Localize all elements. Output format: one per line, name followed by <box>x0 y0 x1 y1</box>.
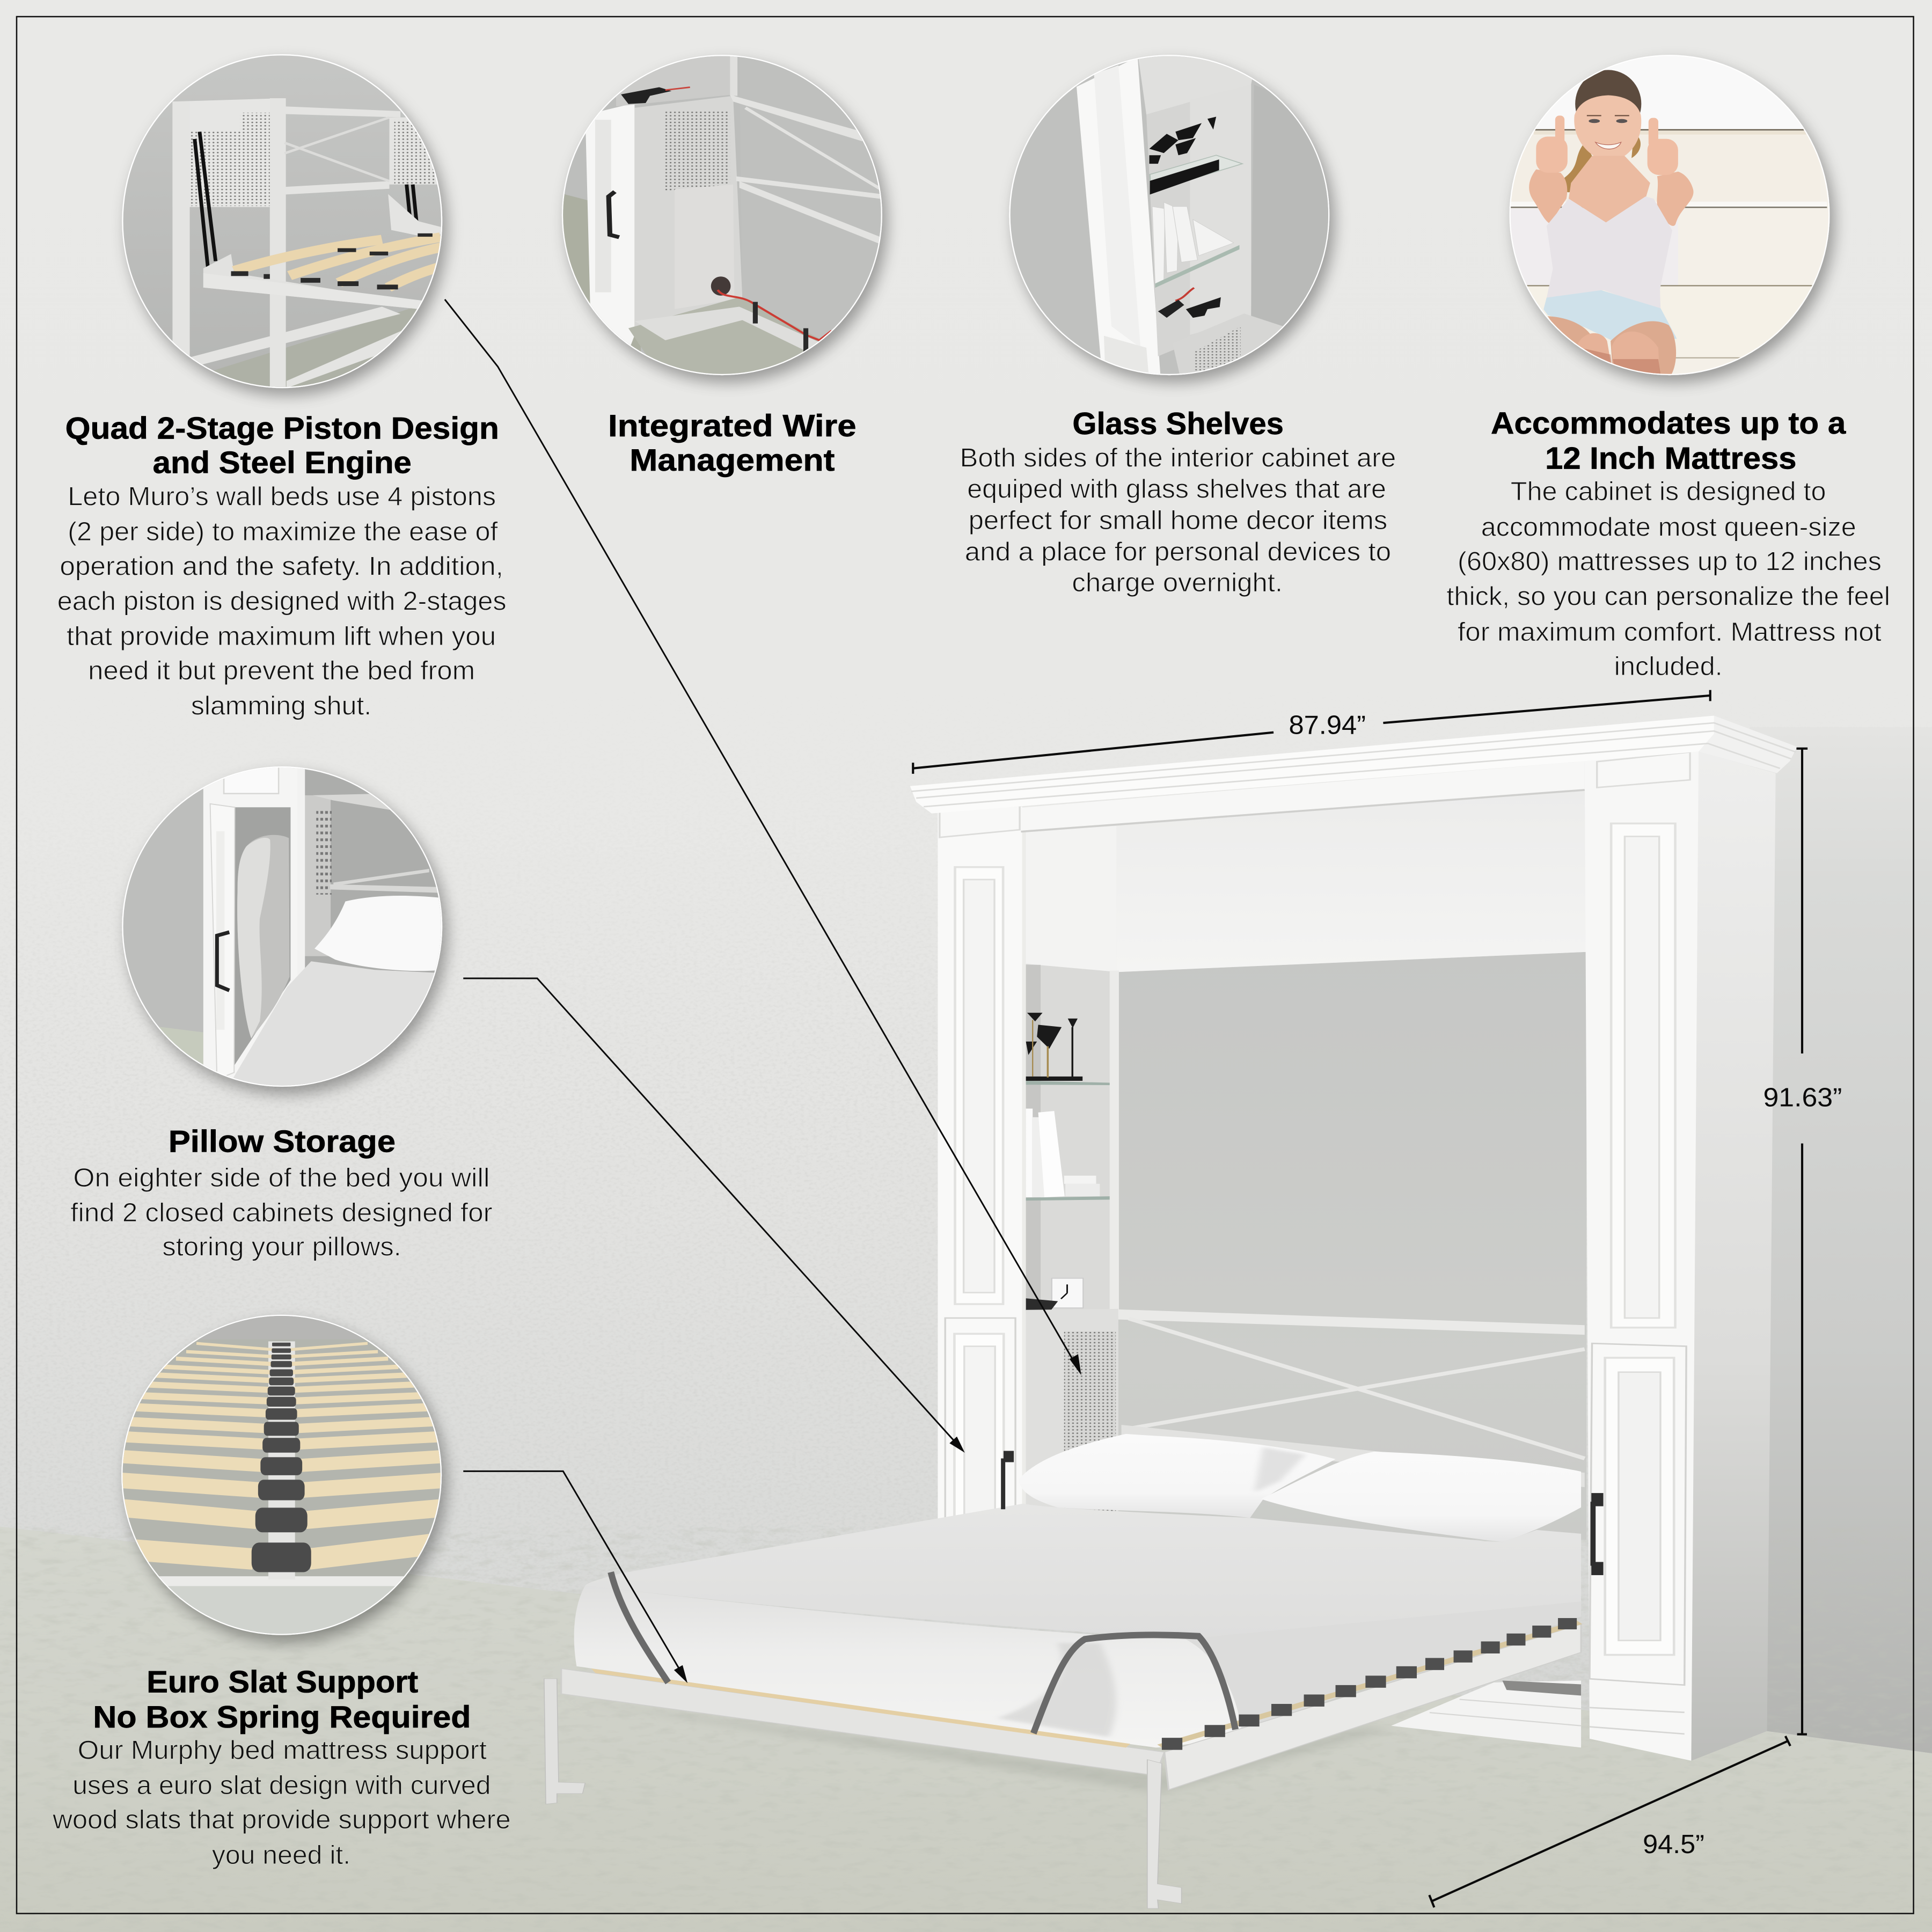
feet <box>1578 332 1660 375</box>
face <box>1574 96 1641 163</box>
mattress side drape <box>1186 1601 1581 1730</box>
body text <box>57 481 507 721</box>
feature heading: integrated wire management <box>608 409 857 478</box>
dimension: width: 87.94” <box>1289 710 1366 740</box>
upper glass shelf <box>1150 155 1242 192</box>
shaded wall right of the cabinet <box>1750 727 1932 1753</box>
concrete back wall <box>1118 952 1586 1540</box>
sunglasses <box>1026 1298 1058 1311</box>
wall texture <box>6 1062 929 1371</box>
body text: need it but prevent the bed from <box>88 656 475 685</box>
floor shadow below bed <box>561 1700 1391 1794</box>
body text: and a place for personal devices to <box>965 537 1391 567</box>
body text: On eighter side of the bed you will <box>73 1163 489 1192</box>
murphy bed with mattress <box>544 1434 1604 1908</box>
right wood slats <box>290 1343 447 1559</box>
feature text: euro slat support <box>52 1665 511 1870</box>
body text: Leto Muro’s wall beds use 4 pistons <box>68 481 496 511</box>
circle shadow and border <box>122 766 442 1087</box>
legs <box>1548 316 1676 375</box>
bed frame side rail <box>1165 1624 1581 1790</box>
cross brace <box>284 118 390 181</box>
stored pillow <box>237 835 290 1038</box>
left retaining strap <box>611 1572 668 1682</box>
open door <box>210 804 235 1079</box>
circle: pillow storage detail <box>118 758 447 1100</box>
vent panel <box>1173 313 1283 382</box>
heading: Euro Slat Support <box>147 1665 418 1700</box>
feature text: glass shelves <box>960 407 1396 597</box>
steel frame posts <box>173 98 401 387</box>
near pillow <box>1261 1452 1581 1542</box>
body text: find 2 closed cabinets designed for <box>70 1198 493 1227</box>
heading <box>65 411 499 480</box>
bed lower rail <box>1122 1425 1585 1487</box>
feature heading: integrated wire management: Integrated Wire <box>608 409 857 443</box>
white cabinet door with handle <box>586 103 634 383</box>
feature heading: integrated wire management: Management <box>630 443 835 478</box>
bed pillow <box>314 896 443 971</box>
body text: (60x80) mattresses up to 12 inches <box>1458 547 1882 576</box>
alarm clock <box>1052 1278 1083 1308</box>
slat end caps <box>1162 1618 1577 1750</box>
body text: thick, so you can personalize the feel <box>1446 581 1890 611</box>
left pilaster <box>938 807 1026 1528</box>
right wall with brace bars <box>730 48 887 383</box>
circle shadow and border <box>122 54 442 388</box>
arrow: pillow storage callout to cabinet <box>463 978 965 1453</box>
hair <box>1575 70 1641 138</box>
far pillow <box>1019 1434 1336 1518</box>
right retaining strap <box>1034 1635 1235 1733</box>
denim shorts <box>1543 290 1677 341</box>
door handle <box>217 932 229 990</box>
slat caps <box>231 233 433 289</box>
body text: that provide maximum lift when you <box>67 621 496 651</box>
slat wood edge along side <box>1160 1622 1579 1746</box>
niche with shelves <box>1026 964 1119 1315</box>
mattress top surface <box>585 1504 1581 1639</box>
red wire with clips <box>718 290 832 352</box>
right plinth <box>1590 1708 1685 1734</box>
right thumbs-up hand <box>1648 118 1678 175</box>
black bird decor <box>1026 1013 1082 1081</box>
mattress <box>232 961 447 1096</box>
white pilaster <box>1077 57 1161 382</box>
dimension: height: 91.63” <box>1763 1082 1842 1112</box>
floor speckle texture <box>0 1527 1932 1932</box>
heading: Accommodates up to a <box>1491 406 1846 441</box>
upper interior <box>1138 53 1257 114</box>
left arm <box>1529 170 1567 224</box>
left thumbs-up hand <box>1536 115 1568 173</box>
dimension: depth: 94.5” <box>1643 1829 1704 1859</box>
circle shadow and border <box>1509 55 1829 375</box>
feature text: mattress size <box>1446 406 1890 681</box>
front frame rail <box>118 1576 447 1586</box>
circle shadow and border <box>562 55 882 375</box>
circle: piston design detail <box>117 48 450 398</box>
left lower door <box>945 1318 1015 1524</box>
right door handle <box>1591 1493 1604 1575</box>
murphy bed cabinet <box>910 716 1797 1761</box>
glass shelf lower <box>1026 1196 1110 1201</box>
body text: Our Murphy bed mattress support <box>78 1736 487 1765</box>
body text: included. <box>1614 652 1723 681</box>
concrete floor <box>0 1527 1932 1932</box>
frame bars <box>313 794 440 893</box>
floor <box>628 297 832 383</box>
center slat holders <box>252 1343 311 1572</box>
side wall <box>1251 85 1338 382</box>
alcove above <box>616 48 737 106</box>
phone and red cable <box>1158 288 1194 318</box>
frieze and crown molding <box>910 716 1797 837</box>
body text: accommodate most queen-size <box>1481 513 1856 542</box>
heading: and Steel Engine <box>153 446 412 480</box>
white tank top <box>1547 196 1672 311</box>
eyes and smile <box>1587 115 1629 149</box>
wire port hole <box>711 276 730 296</box>
wood slats <box>234 237 444 288</box>
heading <box>1491 406 1846 476</box>
circle: glass shelves detail <box>1001 48 1338 382</box>
glass shelf upper <box>1026 1081 1110 1085</box>
body text: perfect for small home decor items <box>969 506 1387 535</box>
center steel bar <box>268 1341 295 1579</box>
heading: 12 Inch Mattress <box>1545 442 1796 476</box>
niche back <box>1146 85 1251 356</box>
body text <box>70 1163 493 1262</box>
open compartment <box>234 807 290 1066</box>
stacked mattresses <box>1506 52 1832 377</box>
right pilaster <box>1585 752 1699 1761</box>
body text: operation and the safety. In addition, <box>60 552 503 581</box>
feature text: pillow storage <box>70 1125 493 1262</box>
heading: Glass Shelves <box>1072 407 1284 441</box>
body text: each piston is designed with 2-stages <box>57 586 507 616</box>
mattress front drape <box>574 1586 1241 1747</box>
cabinet frame <box>203 761 300 1083</box>
bed platform frame <box>203 254 441 309</box>
body text: storing your pillows. <box>162 1232 401 1262</box>
cabinet side panel <box>1691 752 1776 1761</box>
right cabinet wall with vent <box>300 761 447 1089</box>
body text: uses a euro slat design with curved <box>72 1770 491 1800</box>
circle shadow and border <box>121 1315 442 1635</box>
body text: slamming shut. <box>191 691 371 721</box>
mattress corner fold shading <box>998 1643 1116 1737</box>
body text: equiped with glass shelves that are <box>967 474 1386 504</box>
heading <box>93 1665 471 1735</box>
circle shadow and border <box>1009 55 1329 375</box>
circle: euro slat detail <box>118 1313 447 1641</box>
arrow: euro slat callout to bed frame <box>463 1471 687 1683</box>
side panel with vent <box>634 96 742 335</box>
right arm <box>1657 172 1693 226</box>
heading: No Box Spring Required <box>93 1700 471 1735</box>
body text: for maximum comfort. Mattress not <box>1458 617 1882 647</box>
body text: wood slats that provide support where <box>52 1805 511 1834</box>
body text <box>1446 477 1890 681</box>
heading: Quad 2-Stage Piston Design <box>65 411 499 445</box>
body text: (2 per side) to maximize the ease of <box>68 517 498 546</box>
sunglasses on shelf <box>621 87 671 104</box>
wood slat edge <box>591 1668 1130 1747</box>
body text: Both sides of the interior cabinet are <box>960 443 1396 472</box>
black gas pistons <box>195 132 416 270</box>
perforated plate right <box>390 118 438 185</box>
heading: Pillow Storage <box>169 1125 396 1159</box>
black birds <box>1150 116 1219 195</box>
cross brace bars <box>1129 1319 1585 1459</box>
left wood slats <box>118 1343 273 1559</box>
lower glass shelf <box>1155 245 1240 288</box>
right folding leg <box>1147 1760 1182 1908</box>
feature text: quad piston <box>57 411 507 721</box>
body text: charge overnight. <box>1072 568 1283 597</box>
red charging cable top <box>665 87 690 90</box>
body text: The cabinet is designed to <box>1511 477 1826 506</box>
perforated piston plate left <box>173 99 270 207</box>
body text <box>960 443 1396 597</box>
books <box>1152 202 1234 283</box>
books on shelf <box>1026 1109 1100 1197</box>
left door handle <box>1001 1451 1014 1509</box>
ponytail <box>1561 142 1596 192</box>
floor <box>156 1026 210 1083</box>
base molding under the bed <box>1391 1680 1581 1747</box>
body text: you need it. <box>212 1840 350 1870</box>
left folding leg <box>544 1679 585 1804</box>
body text <box>52 1736 511 1870</box>
upper interior back panel <box>1116 790 1586 972</box>
dimension: depth <box>1429 1736 1790 1907</box>
arrow: piston callout to bed <box>445 299 1081 1375</box>
bed frame front rail <box>561 1668 1165 1775</box>
dimension: width <box>913 690 1710 774</box>
upper interior left panel <box>1021 826 1116 972</box>
circle: wire management detail <box>554 48 887 383</box>
sunglasses <box>1186 297 1221 318</box>
circle: woman with mattress photo <box>1506 52 1832 377</box>
back wall strip <box>118 1313 447 1340</box>
lower niche cabinet with perforated vent <box>1026 1309 1118 1540</box>
bed top rail <box>1118 1309 1585 1335</box>
right lower door <box>1590 1343 1686 1685</box>
neck and chest <box>1569 156 1650 222</box>
